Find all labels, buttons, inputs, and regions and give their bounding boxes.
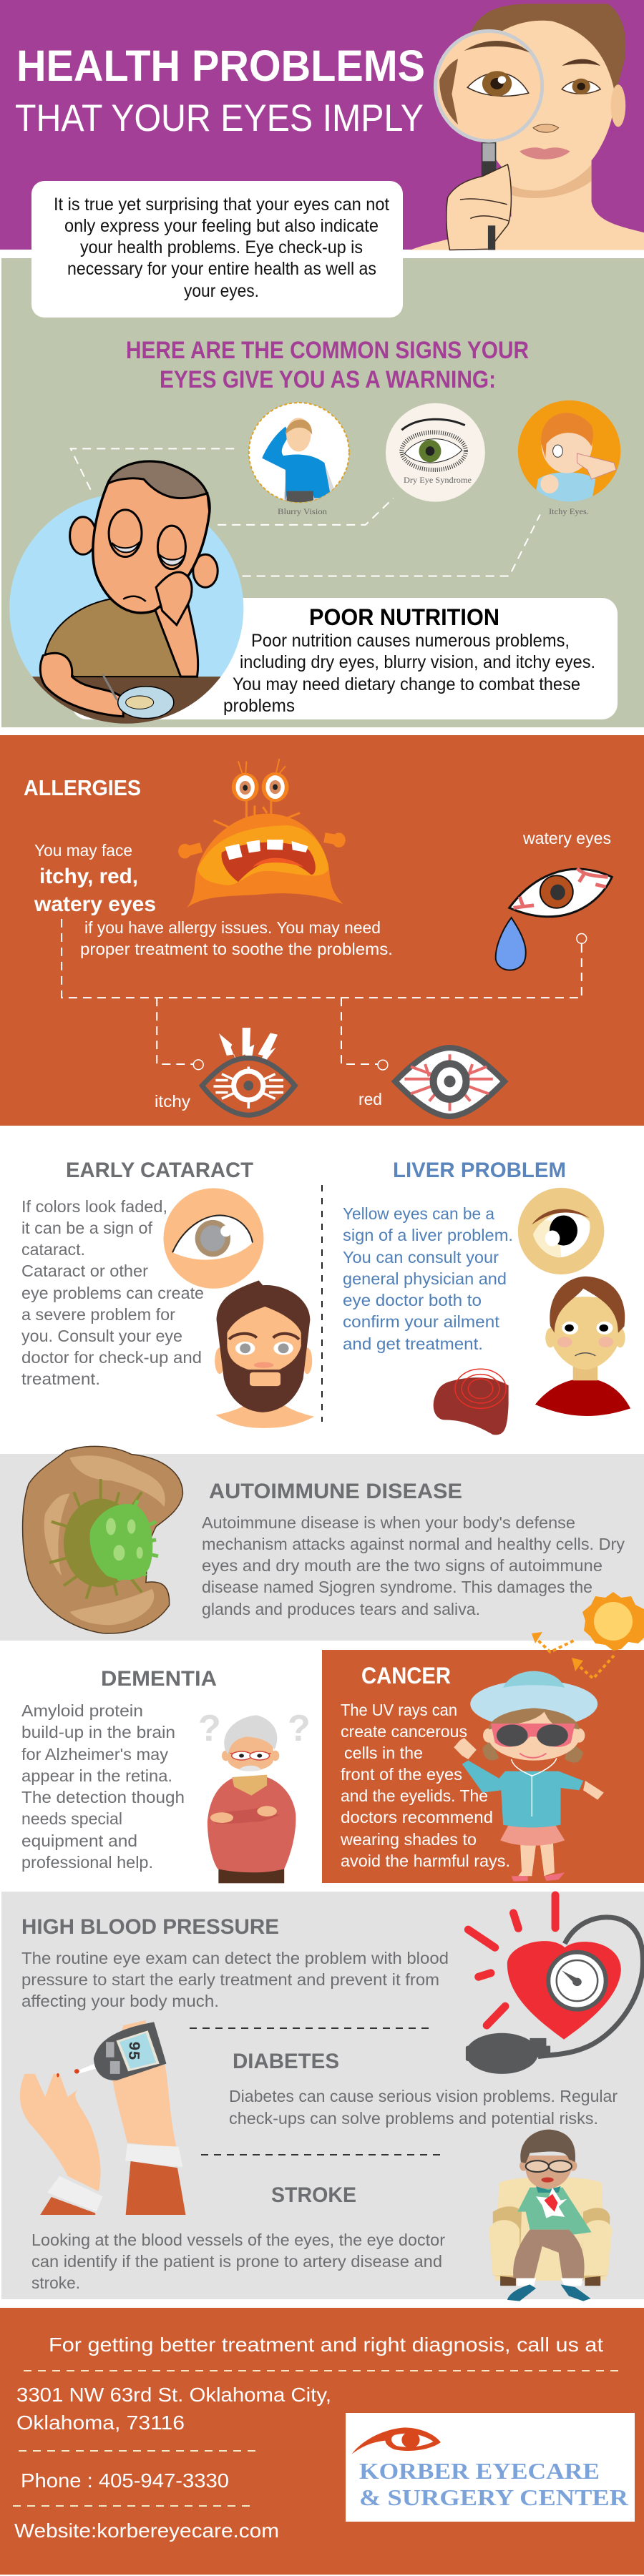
illustration: cataract eye bbox=[163, 1188, 264, 1289]
heading: allergies: ALLERGIES bbox=[24, 775, 141, 800]
intro text box: It is true yet surprising that your eyes can not bbox=[54, 195, 389, 215]
text: footer contact details: Website:korbereyecare.com bbox=[14, 2520, 279, 2542]
text: autoimmune disease: glands and produces tears and saliva. bbox=[202, 1600, 480, 1618]
panel: cancer background bbox=[322, 1650, 644, 1883]
text: stroke bbox=[31, 2183, 445, 2292]
icon: watery eye bbox=[496, 829, 612, 970]
text: footer contact details: For getting better treatment and right diagnosis, call us at bbox=[49, 2334, 603, 2356]
text: cancer: CANCER bbox=[361, 1663, 451, 1688]
illustration: confused old man bbox=[198, 1708, 311, 1883]
heading: common signs: HERE ARE THE COMMON SIGNS YOUR bbox=[126, 337, 529, 364]
text: diabetes: Diabetes can cause serious vision problems. Regular bbox=[229, 2087, 618, 2105]
text: allergies description: watery eyes bbox=[34, 893, 156, 916]
text: early cataract description: If colors look faded, bbox=[21, 1197, 167, 1216]
text: high blood pressure: affecting your body much. bbox=[21, 1992, 219, 2010]
panel: autoimmune background bbox=[0, 1454, 644, 1641]
text box: poor nutrition: You may need dietary change to combat these bbox=[233, 674, 580, 694]
text: footer contact details bbox=[13, 2334, 620, 2542]
panel: blood pressure, diabetes and stroke background bbox=[1, 1892, 644, 2299]
text: cancer: avoid the harmful rays. bbox=[341, 1852, 510, 1870]
text box: poor nutrition: Poor nutrition causes numerous problems, bbox=[251, 631, 570, 651]
text: diabetes bbox=[229, 2050, 618, 2128]
text: dementia: The detection though bbox=[21, 1788, 185, 1806]
text: autoimmune disease bbox=[202, 1480, 625, 1618]
illustration: man having a stroke in armchair bbox=[489, 2130, 612, 2301]
logo: Korber Eyecare: KORBER EYECARE bbox=[359, 2458, 600, 2484]
text: dementia: needs special bbox=[21, 1809, 122, 1828]
heading: common signs: EYES GIVE YOU AS A WARNING: bbox=[160, 366, 496, 393]
text: liver problem description: general physician and bbox=[343, 1269, 507, 1288]
text: high blood pressure bbox=[21, 1915, 449, 2010]
heading: liver problem: LIVER PROBLEM bbox=[393, 1159, 566, 1182]
text: early cataract description: cataract. bbox=[21, 1240, 85, 1259]
text box: poor nutrition: problems bbox=[223, 696, 295, 716]
text: footer contact details: Phone : 405-947-3330 bbox=[21, 2469, 229, 2492]
illustration: hands with glucose meter bbox=[20, 2020, 185, 2215]
illustration: liver bbox=[434, 1369, 509, 1435]
text: dementia: professional help. bbox=[21, 1853, 153, 1872]
text: early cataract description: a severe problem for bbox=[21, 1305, 175, 1324]
text: cancer: create cancerous bbox=[341, 1722, 467, 1741]
logo: Korber Eyecare: & SURGERY CENTER bbox=[359, 2484, 629, 2510]
text: footer contact details: 3301 NW 63rd St. Oklahoma City, bbox=[16, 2384, 331, 2406]
text: dementia: build-up in the brain bbox=[21, 1723, 175, 1741]
text: cancer: front of the eyes bbox=[341, 1765, 462, 1784]
icon: itchy eye: itchy bbox=[155, 1092, 191, 1111]
icon: red eye: red bbox=[358, 1090, 382, 1108]
illustration: allergy monster bbox=[178, 759, 346, 908]
icon: dry eye syndrome bbox=[386, 403, 485, 502]
text box: poor nutrition bbox=[72, 598, 618, 719]
text: dementia: equipment and bbox=[21, 1832, 137, 1850]
text: high blood pressure: HIGH BLOOD PRESSURE bbox=[21, 1915, 279, 1939]
text: cancer: wearing shades to bbox=[340, 1830, 477, 1849]
icon: blurry vision bbox=[249, 403, 349, 516]
icon: sun with uv rays bbox=[532, 1592, 644, 1678]
connector lines between eye symptoms bbox=[62, 919, 587, 1070]
text: allergies description: if you have allergy issues. You may need bbox=[84, 918, 381, 937]
text: early cataract description bbox=[21, 1197, 204, 1388]
text: liver problem description bbox=[343, 1204, 513, 1353]
illustration: bearded man bbox=[215, 1280, 314, 1428]
illustration: hands with glucose meter: 95 bbox=[124, 2041, 142, 2060]
text: autoimmune disease: mechanism attacks against normal and healthy cells. Dry bbox=[202, 1535, 625, 1553]
text: cancer: doctors recommend bbox=[341, 1808, 493, 1827]
intro text box: your health problems. Eye check-up is bbox=[80, 237, 363, 257]
text: allergies description: itchy, red, bbox=[39, 865, 138, 888]
text: footer contact details: Oklahoma, 73116 bbox=[16, 2412, 185, 2434]
connector lines to signs bbox=[71, 448, 540, 576]
illustration: confused old man: ? bbox=[288, 1708, 311, 1749]
text: early cataract description: it can be a sign of bbox=[21, 1219, 153, 1237]
illustration: jaundiced boy bbox=[535, 1277, 630, 1416]
icon: watery eye: watery eyes bbox=[522, 829, 611, 847]
text: early cataract description: eye problems can create bbox=[21, 1284, 204, 1302]
illustration: confused old man: ? bbox=[198, 1708, 221, 1749]
text: diabetes: DIABETES bbox=[233, 2050, 339, 2073]
icon: red eye bbox=[358, 1048, 504, 1116]
text: dementia: DEMENTIA bbox=[101, 1667, 217, 1691]
text: cancer bbox=[340, 1663, 510, 1870]
heading: common signs bbox=[126, 337, 529, 393]
text: early cataract description: doctor for check-up and bbox=[21, 1348, 202, 1367]
illustration: yellow eye bbox=[518, 1188, 604, 1274]
heading: early cataract: EARLY CATARACT bbox=[66, 1159, 253, 1182]
text: liver problem description: confirm your ailment bbox=[343, 1312, 500, 1331]
illustration: heart with blood pressure gauge bbox=[466, 1895, 643, 2074]
text: autoimmune disease: eyes and dry mouth are the two signs of autoimmune bbox=[202, 1556, 602, 1575]
text: high blood pressure: pressure to start the early treatment and prevent it from bbox=[21, 1970, 439, 1989]
intro text box: only express your feeling but also indicate bbox=[64, 216, 379, 236]
text: dementia: for Alzheimer's may bbox=[21, 1745, 169, 1764]
title bbox=[15, 41, 425, 139]
icon: itchy eye bbox=[155, 1028, 295, 1115]
text: autoimmune disease: disease named Sjogren syndrome. This damages the bbox=[202, 1578, 592, 1596]
text: early cataract description: you. Consult your eye bbox=[21, 1327, 182, 1345]
illustration: girl with hat and sunglasses bbox=[454, 1671, 604, 1882]
text: dementia: appear in the retina. bbox=[21, 1766, 172, 1785]
text: early cataract description: treatment. bbox=[21, 1370, 100, 1388]
logo: Korber Eyecare bbox=[346, 2413, 635, 2522]
text: high blood pressure: The routine eye exam can detect the problem with blood bbox=[21, 1949, 449, 1967]
icon: dry eye syndrome: Dry Eye Syndrome bbox=[404, 475, 472, 485]
text box: poor nutrition: POOR NUTRITION bbox=[309, 604, 499, 630]
text: liver problem description: Yellow eyes can be a bbox=[343, 1204, 494, 1223]
text: stroke: STROKE bbox=[271, 2183, 356, 2207]
intro text box bbox=[31, 181, 403, 318]
text: allergies description: You may face bbox=[34, 841, 132, 860]
text: liver problem description: eye doctor both to bbox=[343, 1291, 482, 1309]
intro text box: your eyes. bbox=[184, 281, 259, 301]
text: dementia bbox=[21, 1667, 217, 1872]
icon: itchy eyes: Itchy Eyes. bbox=[549, 506, 589, 516]
icon: itchy eyes bbox=[518, 400, 620, 516]
text: stroke: Looking at the blood vessels of the eyes, the eye doctor bbox=[31, 2231, 445, 2249]
panel: allergies background bbox=[0, 735, 644, 1126]
text: stroke: can identify if the patient is prone to artery disease and bbox=[31, 2252, 442, 2271]
illustration: woman with magnifying glass bbox=[411, 4, 644, 250]
panel: header background bbox=[0, 0, 644, 250]
text: liver problem description: and get treatment. bbox=[343, 1334, 483, 1353]
divider line above stroke bbox=[201, 2154, 441, 2155]
text: early cataract description: Cataract or other bbox=[21, 1262, 148, 1280]
text: cancer: cells in the bbox=[344, 1744, 423, 1762]
title: HEALTH PROBLEMS bbox=[16, 41, 425, 90]
text: autoimmune disease: Autoimmune disease is when your body's defense bbox=[202, 1513, 575, 1532]
text: dementia: Amyloid protein bbox=[21, 1701, 143, 1720]
icon: blurry vision: Blurry Vision bbox=[278, 506, 327, 516]
panel: warning signs background bbox=[1, 258, 644, 727]
text: liver problem description: You can consult your bbox=[343, 1248, 499, 1267]
text: liver problem description: sign of a liver problem. bbox=[343, 1226, 513, 1244]
title: THAT YOUR EYES IMPLY bbox=[15, 97, 424, 139]
illustration: tired man eating bbox=[9, 461, 243, 728]
text: stroke: stroke. bbox=[31, 2273, 80, 2292]
text: cancer: The UV rays can bbox=[341, 1701, 457, 1719]
illustration: autoimmune cell bbox=[23, 1446, 182, 1633]
text: autoimmune disease: AUTOIMMUNE DISEASE bbox=[209, 1480, 462, 1503]
panel: footer background bbox=[0, 2308, 644, 2575]
text: cancer: and the eyelids. The bbox=[341, 1786, 488, 1805]
text box: poor nutrition: including dry eyes, blurry vision, and itchy eyes. bbox=[240, 652, 595, 672]
text: allergies description bbox=[34, 841, 393, 958]
text: allergies description: proper treatment to soothe the problems. bbox=[80, 940, 393, 958]
intro text box: necessary for your entire health as well as bbox=[67, 259, 376, 279]
divider line above diabetes bbox=[190, 2027, 429, 2029]
text: diabetes: check-ups can solve problems and potential risks. bbox=[229, 2109, 598, 2128]
